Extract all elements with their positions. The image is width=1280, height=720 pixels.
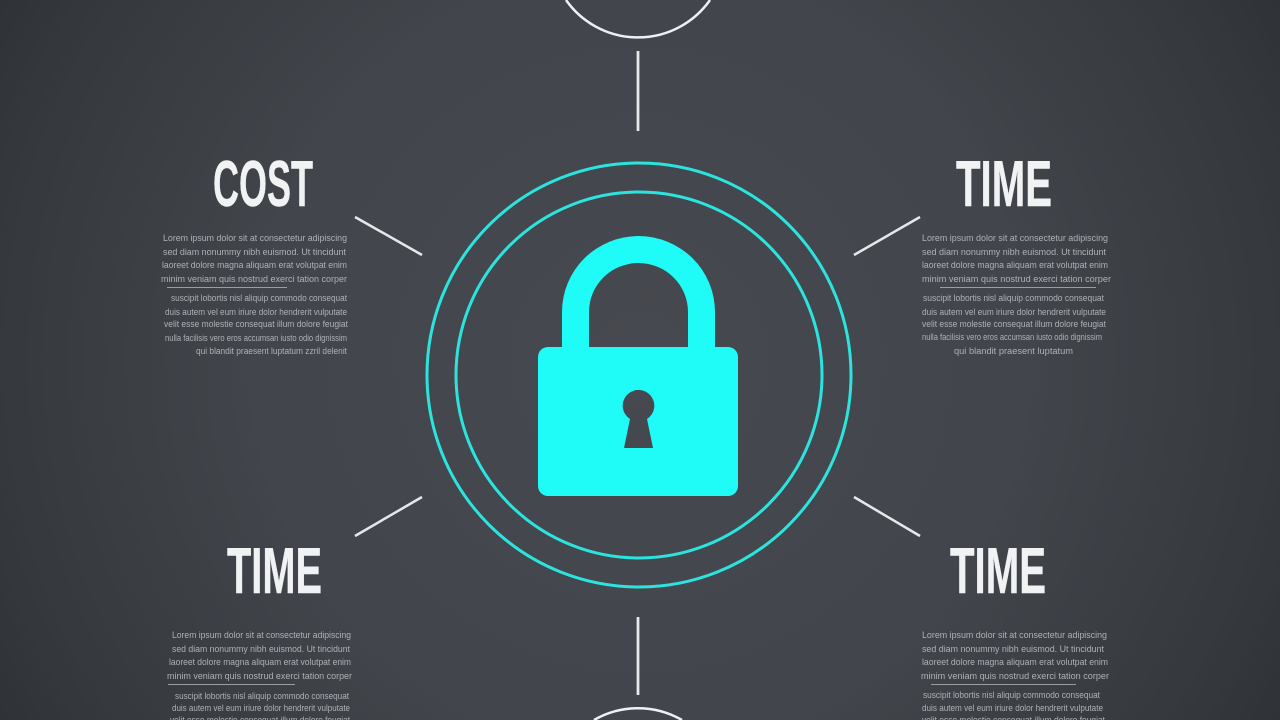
- heading: time lower right: TIME: [950, 534, 1046, 607]
- text block: time upper right: minim veniam quis nostrud exerci tation corper: [922, 274, 1111, 284]
- text block: time upper right: Lorem ipsum dolor sit at consectetur adipiscing: [922, 233, 1108, 243]
- text block: cost: velit esse molestie consequat illum dolore feugiat: [164, 319, 348, 329]
- text block: cost: nulla facilisis vero eros accumsan iusto odio dignissim: [165, 333, 347, 343]
- text block: cost: suscipit lobortis nisl aliquip commodo consequat: [171, 293, 347, 303]
- text block: time upper right: velit esse molestie consequat illum dolore feugiat: [922, 319, 1106, 329]
- text block: cost: laoreet dolore magna aliquam erat volutpat enim: [162, 260, 347, 270]
- connector: upper left: [355, 217, 422, 255]
- text block: time lower left: minim veniam quis nostrud exerci tation corper: [167, 671, 352, 681]
- text block: cost: sed diam nonummy nibh euismod. Ut tincidunt: [163, 247, 346, 257]
- text block: time lower left: sed diam nonummy nibh euismod. Ut tincidunt: [172, 644, 350, 654]
- top circle node: [566, 0, 710, 37]
- text block: cost: minim veniam quis nostrud exerci tation corper: [161, 274, 347, 284]
- heading: time lower left: TIME: [227, 534, 322, 607]
- icon: padlock: [538, 236, 738, 496]
- connector: lower left: [355, 497, 422, 536]
- text block: time lower right: Lorem ipsum dolor sit at consectetur adipiscing: [922, 630, 1107, 640]
- text block: time lower right: minim veniam quis nostrud exerci tation corper: [921, 671, 1109, 681]
- text block: time lower right: duis autem vel eum iriure dolor hendrerit vulputate: [922, 703, 1103, 713]
- panel: time upper right: [922, 147, 1111, 356]
- text block: time upper right: sed diam nonummy nibh euismod. Ut tincidunt: [922, 247, 1106, 257]
- text block: time lower left: [167, 630, 352, 720]
- text block: time lower left: laoreet dolore magna aliquam erat volutpat enim: [169, 657, 351, 667]
- heading: cost: COST: [213, 147, 313, 220]
- text block: cost: qui blandit praesent luptatum zzril delenit: [196, 346, 347, 356]
- text block: time upper right: qui blandit praesent luptatum: [954, 346, 1073, 356]
- text block: time lower right: laoreet dolore magna aliquam erat volutpat enim: [922, 657, 1108, 667]
- padlock shackle: [562, 236, 715, 350]
- text block: cost: duis autem vel eum iriure dolor hendrerit vulputate: [165, 307, 347, 317]
- panel: time lower right: [921, 534, 1109, 720]
- text block: time upper right: duis autem vel eum iriure dolor hendrerit vulputate: [922, 307, 1106, 317]
- text block: time lower left: Lorem ipsum dolor sit at consectetur adipiscing: [172, 630, 351, 640]
- text block: time upper right: nulla facilisis vero eros accumsan iusto odio dignissim: [922, 332, 1102, 342]
- text block: time lower right: [921, 630, 1109, 720]
- connector: lower right: [854, 497, 920, 536]
- panel: cost: [161, 147, 348, 356]
- text block: cost: Lorem ipsum dolor sit at consectetur adipiscing: [163, 233, 347, 243]
- text block: time lower right: sed diam nonummy nibh euismod. Ut tincidunt: [922, 644, 1104, 654]
- connector: top: [637, 51, 639, 131]
- connector: bottom: [637, 617, 639, 695]
- text block: cost: [161, 233, 348, 356]
- text block: time lower left: duis autem vel eum iriure dolor hendrerit vulputate: [172, 703, 350, 713]
- text block: time upper right: suscipit lobortis nisl aliquip commodo consequat: [923, 293, 1104, 303]
- text block: time lower left: suscipit lobortis nisl aliquip commodo consequat: [175, 691, 349, 701]
- outer cyan ring: [427, 163, 851, 587]
- inner cyan ring: [456, 192, 822, 558]
- text block: time lower right: suscipit lobortis nisl aliquip commodo consequat: [923, 690, 1100, 700]
- bottom circle node: [594, 708, 682, 720]
- panel: time lower left: [167, 534, 352, 720]
- padlock body and keyhole: [538, 347, 738, 496]
- text block: time upper right: laoreet dolore magna aliquam erat volutpat enim: [922, 260, 1108, 270]
- connector: upper right: [854, 217, 920, 255]
- text block: time upper right: [922, 233, 1111, 356]
- heading: time upper right: TIME: [956, 147, 1052, 220]
